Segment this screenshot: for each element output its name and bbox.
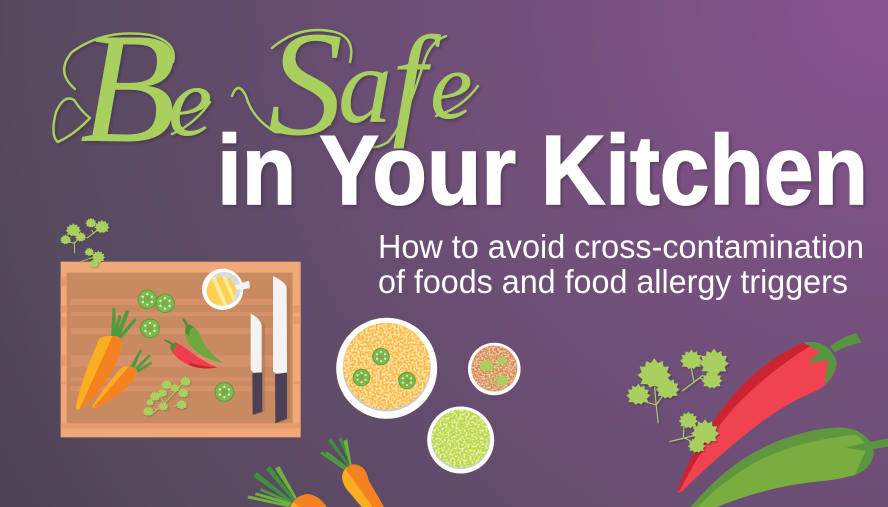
sprig 2 (680, 349, 729, 391)
cucumber toppings (353, 348, 416, 389)
heading: Be Safe: a (338, 27, 392, 146)
red pepper (677, 333, 862, 493)
parsley sprigs right (626, 349, 729, 453)
green chili (182, 318, 224, 363)
parsley on board (143, 376, 191, 416)
large knife (273, 276, 290, 423)
red chili (164, 339, 217, 369)
sprig 1 (626, 358, 680, 423)
cutting board illustration (61, 262, 301, 437)
green pepper (691, 427, 888, 507)
subtitle (378, 229, 864, 301)
heading: Be Safe: f (392, 12, 442, 150)
carrot left (247, 466, 327, 507)
carrot right (320, 437, 384, 507)
large carrot (76, 307, 137, 409)
large bowl (336, 318, 437, 419)
sprig 3 (669, 411, 719, 453)
small spice bowl (468, 343, 521, 395)
carrots at bottom edge (247, 437, 384, 507)
subtitle: How to avoid cross-contamination (378, 229, 864, 266)
heading: Be Safe: e (430, 32, 473, 139)
subtitle: of foods and food allergy triggers (378, 264, 848, 301)
heading: Be Safe: B (80, 1, 177, 176)
small knife (251, 313, 265, 415)
cup (202, 269, 250, 310)
heading: Be Safe (53, 1, 478, 176)
cucumber slices (137, 289, 234, 402)
heading: Be Safe: e (168, 46, 212, 157)
parsley sprigs above board (60, 218, 110, 268)
heading: Be Safe: S (268, 1, 343, 167)
green herb bowl (427, 406, 494, 474)
small carrot (92, 349, 152, 408)
